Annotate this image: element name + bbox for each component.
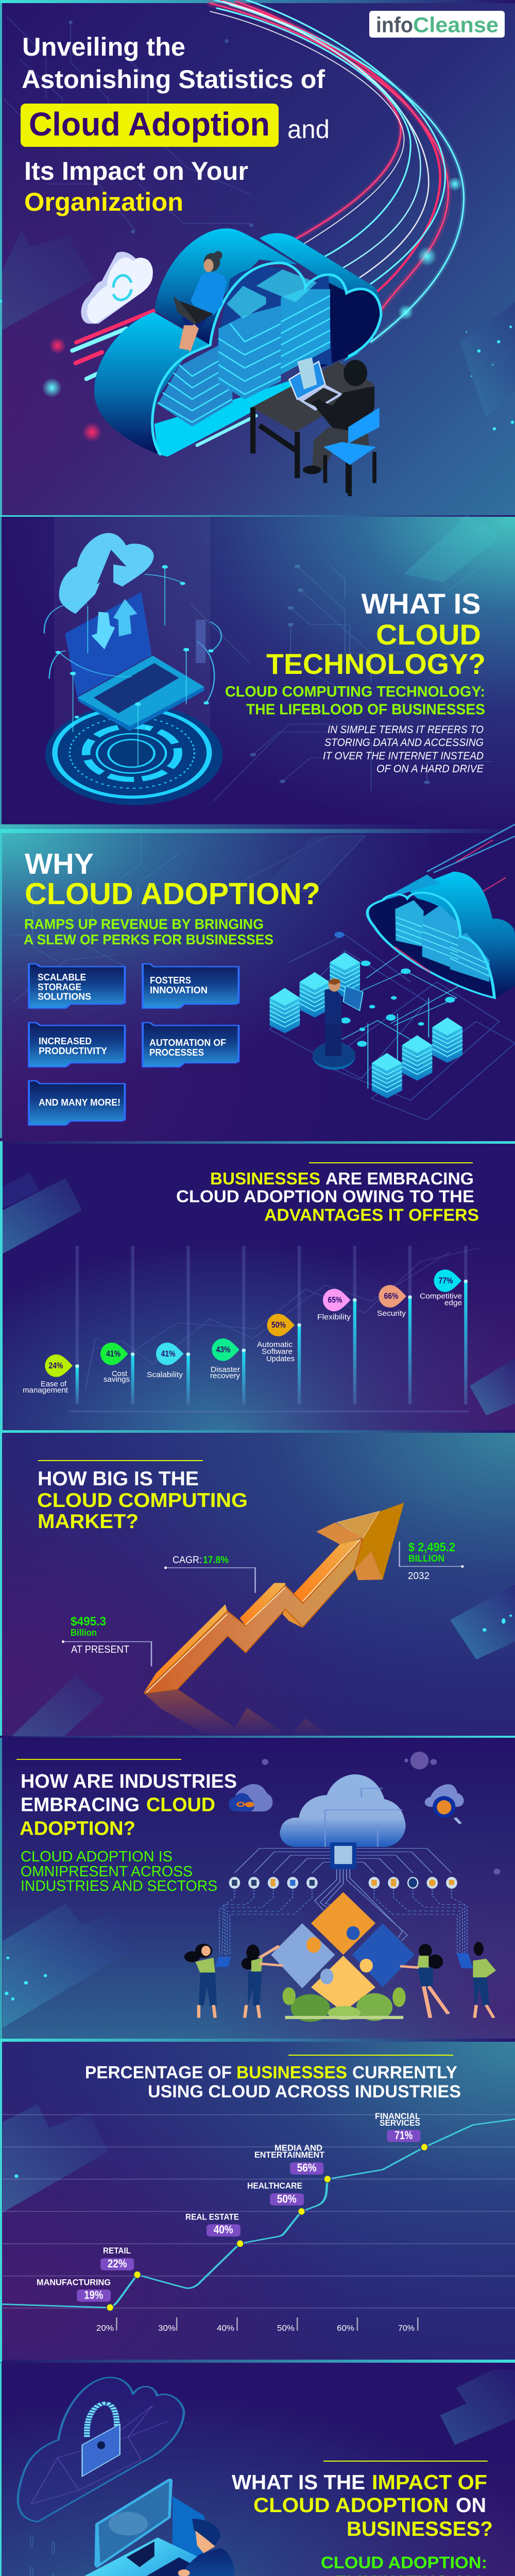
heading: businesses are embracing [176, 1169, 479, 1224]
title: Cloud Adoption [29, 106, 270, 143]
text block: definition: OF ON A HARD DRIVE [376, 763, 484, 775]
chart: line across industries: FINANCIAL [375, 2111, 420, 2121]
panel: what is cloud technology [0, 515, 515, 831]
circuit decoration left [10, 835, 366, 1002]
subheading: OMNIPRESENT ACROSS [21, 1863, 193, 1880]
heading: businesses are embracing: BUSINESSES [210, 1169, 320, 1188]
heading: why cloud adoption [25, 848, 320, 911]
rule [309, 1162, 473, 1163]
heading: what is cloud technology [266, 587, 486, 680]
subheading: CLOUD ADOPTION: [321, 2553, 487, 2572]
heading: impact of cloud adoption: WHAT IS THE [232, 2471, 365, 2494]
chart: line across industries: MEDIA AND [274, 2143, 322, 2153]
chart: advantage bars and pins [23, 1246, 469, 1413]
decor shapes [3, 2104, 108, 2213]
icon: cloud with gears [229, 1784, 272, 1811]
chart: advantage bars and pins: Software [262, 1347, 293, 1356]
subheading [24, 916, 273, 947]
callout: present value [62, 1615, 151, 1666]
chart: line across industries: 50% [277, 2193, 297, 2205]
chart: line across industries: 60% [337, 2324, 354, 2333]
chart: advantage bars and pins: 65% [328, 1295, 342, 1304]
card: scalable storage solutions: STORAGE [38, 982, 81, 992]
heading: impact of cloud adoption: ON [456, 2494, 486, 2517]
rule [38, 1460, 203, 1461]
chart: line across industries: 70% [398, 2324, 415, 2333]
logo: infoCleanse top: info [376, 12, 413, 37]
heading: impact of cloud adoption: IMPACT OF [372, 2471, 487, 2494]
chart: advantage bars and pins: 43% [216, 1345, 231, 1354]
title: Its Impact on Your [24, 157, 248, 185]
illustration: puzzle pieces [271, 1892, 415, 2012]
subheading: CLOUD ADOPTION IS [21, 1849, 173, 1865]
chart: line across industries: 50% [277, 2324, 295, 2333]
card: fosters innovation: FOSTERS [150, 975, 191, 986]
chart: line across industries: 40% [217, 2324, 234, 2333]
card: scalable storage solutions [29, 964, 125, 1008]
heading: percentage of businesses: USING CLOUD ACROSS INDUSTRIES [148, 2082, 461, 2102]
chart: advantage bars and pins: 66% [384, 1291, 399, 1301]
heading: how are industries: HOW ARE INDUSTRIES [21, 1771, 237, 1792]
subheading: THE LIFEBLOOD OF BUSINESSES [246, 702, 485, 718]
chart: line across industries: 30% [158, 2324, 176, 2333]
chart: line across industries: 56% [297, 2161, 317, 2174]
text block: definition: IN SIMPLE TERMS IT REFERS TO [328, 724, 484, 736]
card: increased productivity [29, 1023, 125, 1067]
illustration: woman with laptop [173, 251, 227, 351]
heading: percentage of businesses: PERCENTAGE OF [85, 2063, 232, 2082]
callout: present value: AT PRESENT [71, 1644, 129, 1655]
chart: advantage bars and pins: Ease of [41, 1380, 67, 1388]
chart: line across industries: 19% [84, 2289, 103, 2301]
illustration: circuit board with servers [269, 932, 515, 1120]
illustration: laptop with cloud and disc [44, 533, 222, 805]
panel: how are industries embracing [0, 1738, 515, 2042]
chart: advantage bars and pins: savings [104, 1375, 130, 1384]
heading: percentage of businesses: BUSINESSES [236, 2063, 347, 2082]
card: fosters innovation: INNOVATION [150, 985, 208, 995]
text block: definition: IT OVER THE INTERNET INSTEAD [323, 750, 484, 762]
title: Unveiling the [22, 32, 185, 61]
chart: advantage bars and pins: Competitive [420, 1292, 462, 1301]
heading: impact of cloud adoption: CLOUD ADOPTION [253, 2494, 449, 2517]
illustration: cloud with servers [94, 228, 381, 457]
heading: percentage of businesses: CURRENTLY [352, 2063, 457, 2082]
title [21, 32, 330, 216]
chart: line across industries: 40% [214, 2223, 233, 2236]
chart: line across industries: HEALTHCARE [247, 2181, 302, 2191]
callout: 2032 value: $ 2,495.2 [408, 1540, 455, 1554]
chart: advantage bars and pins: 50% [271, 1320, 286, 1330]
card: automation of processes: PROCESSES [149, 1047, 204, 1058]
illustration: light streaks [42, 0, 464, 445]
subheading: INDUSTRIES AND SECTORS [21, 1878, 217, 1894]
heading: impact of cloud adoption: BUSINESSES? [347, 2518, 493, 2540]
heading: why cloud adoption: WHY [25, 848, 94, 880]
card: scalable storage solutions: SCALABLE [38, 972, 86, 982]
chart: advantage bars and pins: Flexibility [317, 1313, 351, 1321]
chart: line across industries: ENTERTAINMENT [254, 2150, 325, 2160]
callout: CAGR: CAGR: [173, 1555, 202, 1566]
title: and [287, 115, 330, 144]
chart: advantage bars and pins: Disaster [211, 1365, 240, 1374]
subheading: A SLEW OF PERKS FOR BUSINESSES [24, 931, 273, 947]
chart: advantage bars and pins: recovery [210, 1371, 240, 1380]
callout: 2032 value: 2032 [408, 1571, 430, 1582]
callout: present value: Billion [71, 1628, 97, 1638]
illustration: man at desk [251, 358, 380, 496]
chart: advantage bars and pins: edge [444, 1299, 462, 1308]
card: automation of processes: AUTOMATION OF [149, 1038, 226, 1048]
title: Organization [24, 188, 183, 216]
heading: what is cloud technology: TECHNOLOGY? [266, 648, 486, 680]
heading: how are industries [20, 1771, 237, 1839]
card: increased productivity: PRODUCTIVITY [39, 1046, 107, 1056]
heading: how big is the market: CLOUD COMPUTING [37, 1489, 248, 1512]
heading: percentage of businesses [85, 2063, 461, 2102]
illustration: plants [283, 1987, 406, 2022]
text block: definition: STORING DATA AND ACCESSING [324, 737, 484, 749]
card: and many more [29, 1081, 125, 1125]
heading: how are industries: CLOUD [146, 1794, 215, 1816]
logo: infoCleanse top: Cleanse [413, 12, 499, 37]
chart: line across industries: MANUFACTURING [37, 2277, 111, 2287]
panel: cloud computing market [0, 1433, 515, 1738]
rule [323, 2461, 488, 2462]
logo: infoCleanse top [369, 11, 505, 38]
subheading: RAMPS UP REVENUE BY BRINGING [24, 916, 264, 932]
heading: how are industries: ADOPTION? [20, 1818, 135, 1839]
chart: advantage bars and pins: Automatic [257, 1341, 293, 1349]
subheading [21, 1849, 217, 1894]
chart: advantage bars and pins: Security [377, 1309, 406, 1318]
chart: advantage bars and pins: Cost [112, 1369, 128, 1378]
heading: how are industries: EMBRACING [21, 1794, 140, 1816]
illustration: team of four [184, 1942, 496, 2018]
decor shapes [3, 1173, 515, 1415]
chart: advantage bars and pins: management [23, 1386, 68, 1395]
panel: businesses embracing advantages [0, 1141, 515, 1443]
particles [0, 300, 514, 431]
illustration: large cloud with servers [367, 824, 515, 998]
chart: advantage bars and pins: 41% [161, 1349, 175, 1359]
hero circuit and decor shapes [2, 16, 515, 417]
decor shapes [3, 1752, 500, 2028]
decor shapes [30, 2370, 515, 2576]
callout: 2032 value [400, 1540, 464, 1582]
heading: how big is the market: HOW BIG IS THE [38, 1468, 199, 1490]
callout: CAGR: 17.8% [203, 1555, 229, 1566]
chart: line across industries: 20% [96, 2324, 114, 2333]
chart: rising arrow [144, 1503, 404, 1736]
circuit decoration [191, 515, 515, 801]
card: automation of processes [143, 1023, 238, 1067]
decor shapes [11, 1585, 515, 1736]
heading: impact of cloud adoption [232, 2471, 493, 2540]
chart: line across industries: SERVICES [380, 2118, 420, 2128]
text block: definition [323, 724, 484, 775]
subheading [284, 2553, 488, 2576]
icon: small white cloud with sync arrows [81, 252, 153, 324]
section background: hero [0, 0, 515, 515]
callout: present value: $495.3 [71, 1615, 106, 1629]
subheading [225, 684, 485, 718]
heading: businesses are embracing: ADVANTAGES IT OFFERS [264, 1206, 479, 1224]
chart: advantage bars and pins: Scalability [147, 1370, 183, 1379]
panel: percentage of businesses [0, 2042, 515, 2363]
callout: CAGR [164, 1555, 255, 1593]
chart: line across industries: REAL ESTATE [185, 2212, 239, 2222]
title: Astonishing Statistics of [22, 65, 325, 94]
heading: what is cloud technology: CLOUD [376, 618, 481, 651]
chart: line across industries: 22% [108, 2257, 127, 2270]
rule [16, 1759, 181, 1760]
card: fosters innovation [143, 964, 238, 1008]
heading: businesses are embracing: ARE EMBRACING [325, 1169, 474, 1188]
chart: advantage bars and pins: 24% [48, 1361, 63, 1370]
subheading: CLOUD COMPUTING TECHNOLOGY: [225, 684, 485, 700]
heading: businesses are embracing: CLOUD ADOPTION OWING TO THE [176, 1187, 474, 1206]
illustration: man at computer [79, 2479, 236, 2576]
chart: line across industries: 71% [394, 2129, 413, 2142]
chart: advantage bars and pins: Updates [266, 1354, 295, 1363]
heading: why cloud adoption: CLOUD ADOPTION? [25, 877, 320, 911]
card: and many more: AND MANY MORE! [39, 1097, 121, 1108]
chart: line across industries: RETAIL [103, 2246, 131, 2256]
chart: advantage bars and pins: 41% [106, 1349, 121, 1359]
card: increased productivity: INCREASED [39, 1036, 92, 1046]
heading: what is cloud technology: WHAT IS [362, 587, 481, 620]
chart: advantage bars and pins: 77% [439, 1276, 453, 1285]
chart: line across industries [0, 2111, 515, 2333]
callout: 2032 value: BILLION [408, 1553, 444, 1564]
illustration: cloud with padlock [18, 2378, 184, 2522]
illustration: cloud with chip and connectors [219, 1774, 467, 1955]
panel: impact of cloud adoption [0, 2363, 515, 2576]
heading: how big is the market: MARKET? [38, 1511, 139, 1533]
heading: how big is the market [37, 1468, 248, 1533]
rule [288, 2055, 453, 2056]
panel: why cloud adoption [0, 824, 515, 1144]
icon: cloud with magnifier [425, 1784, 464, 1824]
card: scalable storage solutions: SOLUTIONS [38, 992, 91, 1002]
